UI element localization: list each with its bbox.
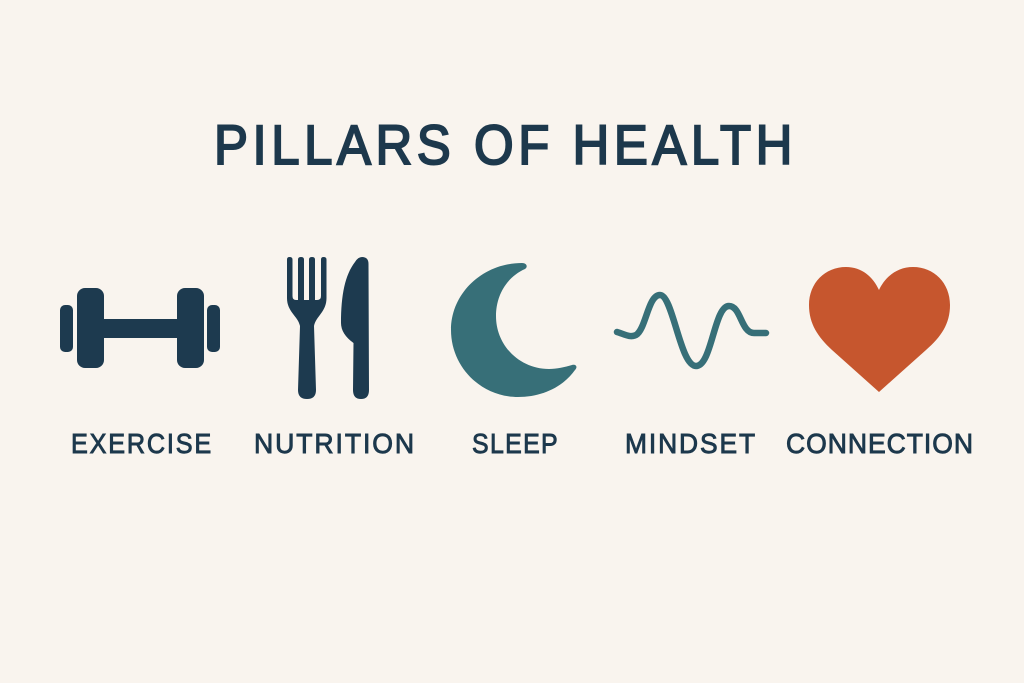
icon: dumbbell bbox=[60, 288, 220, 368]
label: nutrition: NUTRITION bbox=[254, 428, 416, 459]
panel: mindset bbox=[617, 295, 766, 459]
panel: nutrition bbox=[254, 257, 416, 459]
label: connection: CONNECTION bbox=[786, 428, 974, 459]
label: sleep: SLEEP bbox=[472, 428, 559, 459]
label: exercise: EXERCISE bbox=[71, 428, 213, 459]
panel: connection bbox=[786, 267, 974, 459]
icon: heart bbox=[809, 267, 950, 392]
panel: sleep bbox=[451, 263, 576, 459]
icon: crescent moon bbox=[451, 263, 576, 397]
title: PILLARS OF HEALTH bbox=[214, 113, 797, 176]
icon: wave line bbox=[617, 295, 766, 366]
icon: fork and knife bbox=[287, 257, 369, 399]
icon: knife bbox=[341, 257, 369, 399]
panel: exercise bbox=[60, 288, 220, 459]
icon: fork bbox=[287, 257, 326, 399]
label: mindset: MINDSET bbox=[625, 428, 757, 459]
